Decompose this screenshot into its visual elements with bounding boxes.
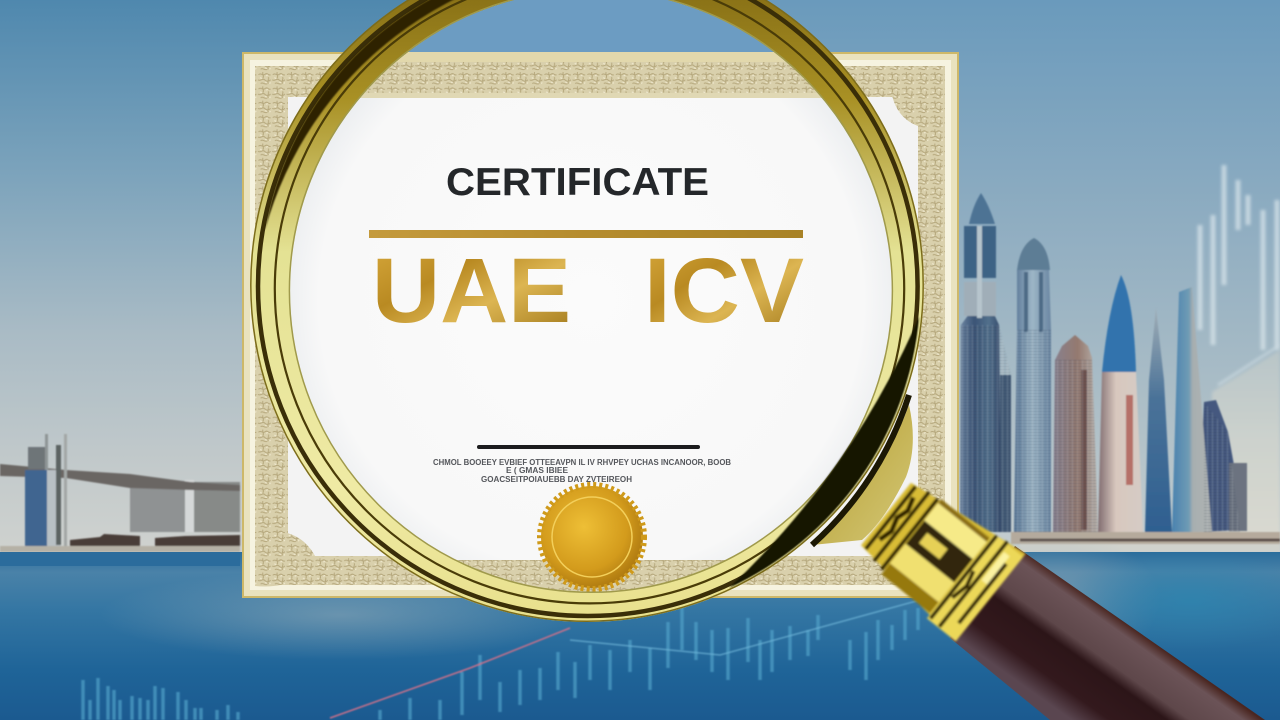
certificate heading: CERTIFICATE: [446, 161, 709, 204]
faint upward chart bars over the sky: [1200, 165, 1280, 385]
background sky: [0, 0, 1280, 552]
certificate frame: [243, 53, 958, 597]
black shadow band at lower right: [729, 317, 919, 588]
ornamental border band: [255, 66, 945, 585]
corner ornament: top right: [890, 70, 945, 126]
gold collar: [851, 470, 1026, 641]
gold divider: [369, 230, 803, 238]
corner ornament: bottom left: [255, 531, 316, 586]
wooden grip: [950, 546, 1265, 720]
gold title: UAE: UAE: [372, 240, 571, 342]
lens contents: magnified certificate: [360, 0, 822, 592]
Dubai skyline towers: [960, 193, 1280, 552]
magnifying glass ring: [250, 0, 924, 622]
sea: [0, 530, 1280, 720]
olive rim joining the handle: [812, 405, 913, 545]
fine print: E ( GMAS IBIEE: [506, 466, 569, 475]
bridge structure at left: [0, 434, 240, 552]
magnified top ornament band: [360, 52, 822, 98]
gold seal: [540, 485, 644, 589]
magnified sky: [408, 0, 774, 52]
dark reflection at upper left: [265, 0, 617, 230]
magnified bottom ornament band: [457, 560, 725, 592]
fine print: GOACSEITPOIAUEBB DAY ZVTEIREOH: [481, 475, 632, 484]
fine print: [433, 459, 731, 482]
stock chart reflected in the water: [83, 600, 920, 720]
gold title: ICV: ICV: [644, 240, 804, 342]
fine print: CHMOL BOOEEY EVBIEF OTTEEAVPN IL IV RHVPEY UCHAS INCANOOR, BOOB: [433, 458, 731, 467]
magnifying glass handle: [851, 470, 1265, 720]
signature line: [477, 445, 700, 449]
